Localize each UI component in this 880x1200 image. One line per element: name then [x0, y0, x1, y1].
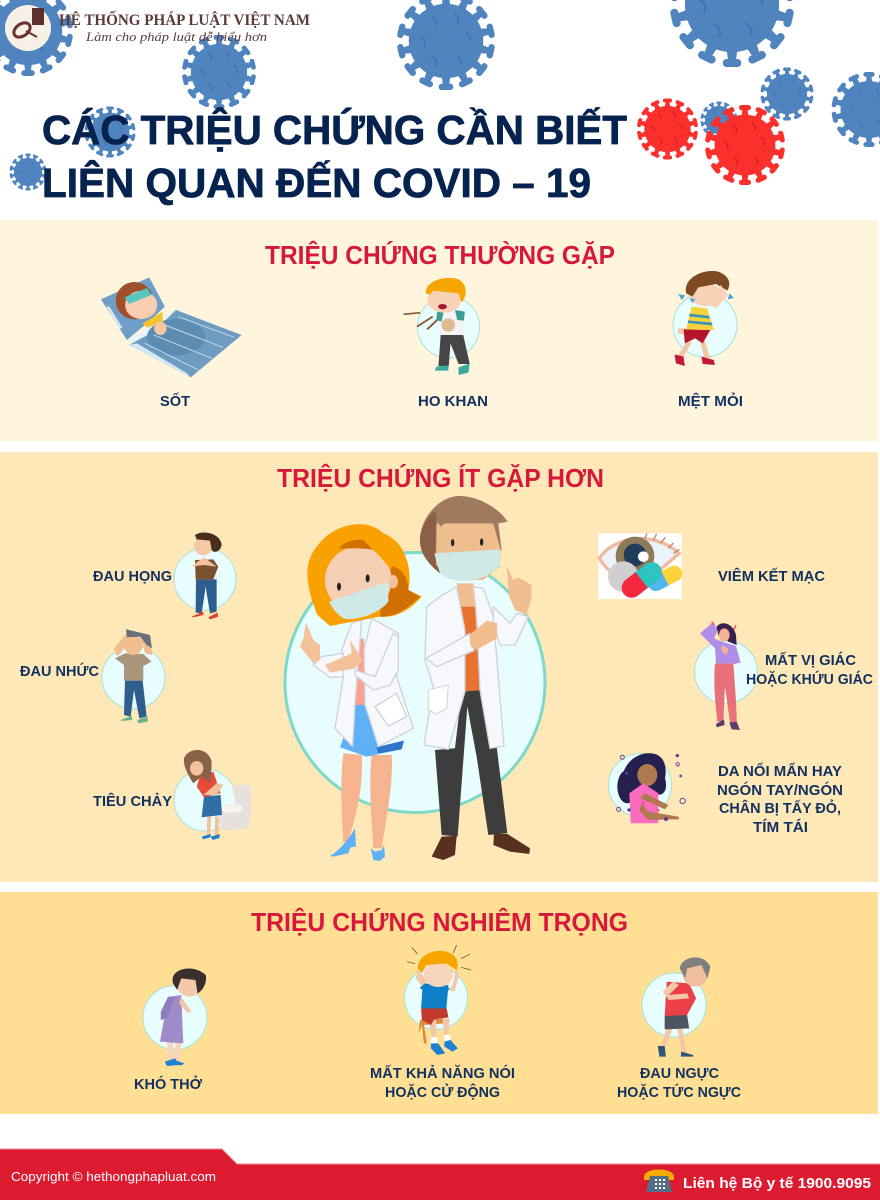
- panel: serious symptoms: [0, 892, 878, 1114]
- label: fatigue: MỆT MỎI: [678, 392, 743, 410]
- icon: coughing boy: [404, 278, 480, 375]
- brand name: HỆ THỐNG PHÁP LUẬT VIỆT NAM: [59, 11, 310, 29]
- label: skin rash: NGÓN TAY/NGÓN: [717, 781, 843, 799]
- heading: common symptoms: TRIỆU CHỨNG THƯỜNG GẶP: [265, 240, 615, 270]
- icon: eye and pills: [598, 533, 685, 602]
- icon: diarrhea girl: [174, 750, 251, 840]
- icon: woman with loss of taste: [694, 622, 758, 730]
- label: loss of speech or movement: [370, 1064, 515, 1101]
- label: difficulty breathing: KHÓ THỞ: [134, 1075, 202, 1093]
- woman doctor: [341, 753, 362, 843]
- label: chest pain: ĐAU NGỰC: [640, 1065, 719, 1082]
- label: aches: ĐAU NHỨC: [20, 662, 99, 680]
- heading: serious symptoms: TRIỆU CHỨNG NGHIÊM TRỌNG: [251, 907, 628, 937]
- label: conjunctivitis: VIÊM KẾT MẠC: [718, 567, 825, 585]
- label: loss of speech or movement: MẤT KHẢ NĂNG NÓI: [370, 1064, 515, 1082]
- label: sore throat: ĐAU HỌNG: [93, 568, 172, 585]
- icon: telephone: [644, 1170, 674, 1192]
- heading: less common symptoms: TRIỆU CHỨNG ÍT GẶP HƠN: [277, 463, 604, 493]
- panel: common symptoms: [0, 220, 878, 441]
- brand slogan: Làm cho pháp luật dễ hiểu hơn: [85, 29, 267, 44]
- label: skin rash: DA NỔI MẨN HAY: [718, 762, 842, 780]
- label: skin rash: TÍM TÁI: [753, 819, 808, 836]
- icon: man with chest pain: [642, 957, 710, 1057]
- label: loss of taste or smell: MẤT VỊ GIÁC: [765, 652, 856, 669]
- illustration: two doctors in masks: [285, 496, 545, 861]
- icon: aching person: [102, 629, 165, 723]
- title: CÁC TRIỆU CHỨNG CẦN BIẾT: [42, 107, 627, 153]
- icon: woman short of breath: [143, 969, 207, 1066]
- title: LIÊN QUAN ĐẾN COVID – 19: [42, 160, 591, 206]
- man doctor: [435, 690, 507, 837]
- label: dry cough: HO KHAN: [418, 393, 488, 410]
- footer bar: [0, 1149, 880, 1200]
- label: fever: SỐT: [160, 392, 190, 410]
- background viruses: [0, 0, 880, 190]
- icon: sore throat person: [174, 532, 236, 619]
- icon: boy unable to move or speak: [404, 945, 471, 1055]
- icon: tired boy: [673, 271, 737, 366]
- logo: [5, 5, 51, 51]
- icon: woman with skin rash: [608, 753, 685, 823]
- label: loss of speech or movement: HOẶC CỬ ĐỘNG: [385, 1083, 500, 1101]
- label: chest pain: HOẶC TỨC NGỰC: [617, 1083, 741, 1101]
- label: skin rash: CHÂN BỊ TẤY ĐỎ,: [719, 799, 841, 817]
- hotline text: Liên hệ Bộ y tế 1900.9095: [683, 1175, 871, 1192]
- label: diarrhea: TIÊU CHẢY: [93, 792, 172, 810]
- label: skin rash: [717, 762, 843, 836]
- panel: less common symptoms: [0, 452, 878, 882]
- label: loss of taste or smell: [746, 652, 873, 688]
- label: chest pain: [617, 1065, 741, 1101]
- label: loss of taste or smell: HOẶC KHỨU GIÁC: [746, 670, 873, 688]
- copyright text: Copyright © hethongphapluat.com: [11, 1169, 216, 1184]
- title: [42, 107, 627, 206]
- icon: fever child in bed: [101, 277, 242, 377]
